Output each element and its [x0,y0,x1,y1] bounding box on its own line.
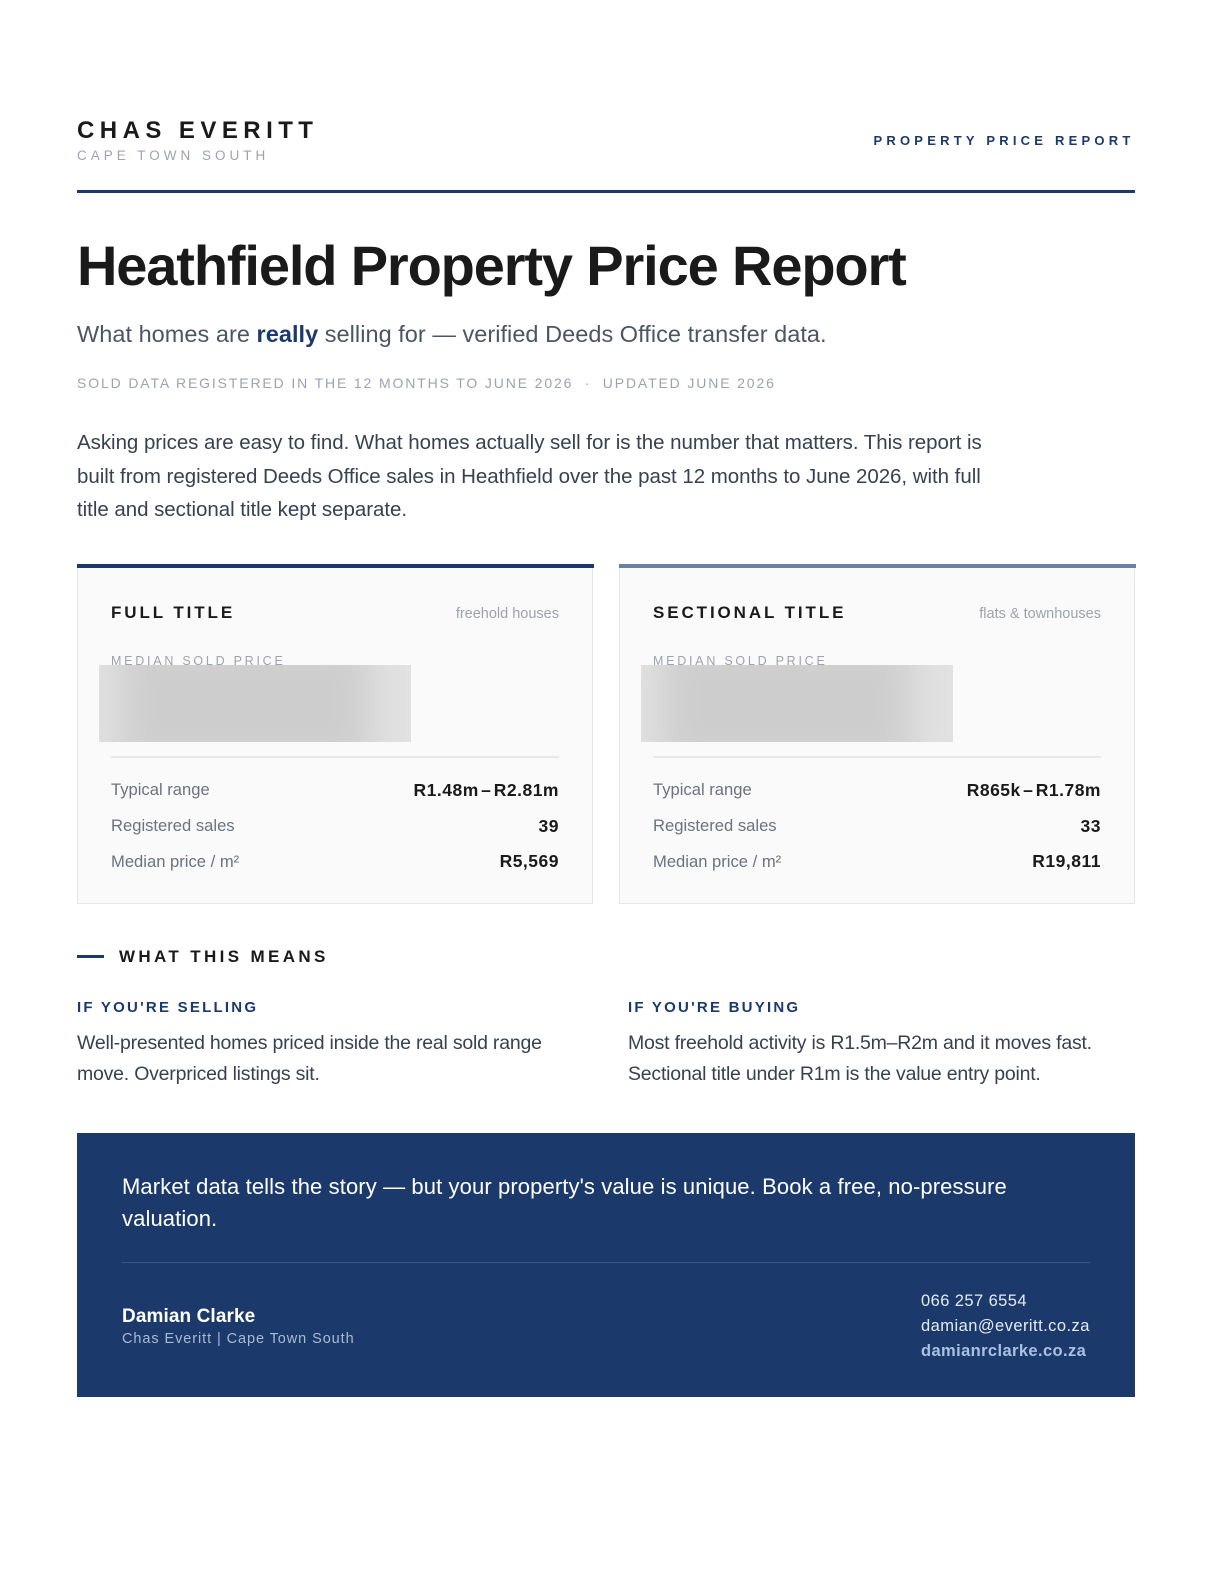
blurred median price [99,665,411,742]
intro text: built from registered Deeds Office sales in Heathfield over the past 12 months to June 2026, with full [77,464,981,488]
buying advice: Most freehold activity is R1.5m–R2m and it moves fast. [628,1032,1092,1054]
median label: MEDIAN SOLD PRICE [111,654,286,668]
heading: sectional title: SECTIONAL TITLE [653,603,846,622]
contact website: damianrclarke.co.za [921,1342,1086,1360]
brand name and location [77,117,318,163]
brand name and location: CAPE TOWN SOUTH [77,148,269,163]
median label: MEDIAN SOLD PRICE [653,654,828,668]
section heading: what this means: WHAT THIS MEANS [119,947,329,966]
value: median per m2: R19,811 [1032,851,1101,871]
panel: full title [77,564,593,904]
descriptor: freehold houses [456,606,559,622]
selling advice [77,999,542,1085]
stat: median per m2: Median price / m² [111,852,239,871]
report label: PROPERTY PRICE REPORT [873,132,1134,148]
agent company: Chas Everitt | Cape Town South [122,1331,355,1347]
contact email: damian@everitt.co.za [921,1317,1090,1335]
intro text: Asking prices are easy to find. What homes actually sell for is the number that matters. This report is [77,431,982,454]
contact phone: 066 257 6554 [921,1292,1027,1310]
call to action text: valuation. [122,1206,217,1230]
intro text [77,431,982,521]
value: typical range: R1.48m – R2.81m [414,780,559,800]
data note: SOLD DATA REGISTERED IN THE 12 MONTHS TO JUNE 2026 · UPDATED JUNE 2026 [77,375,776,391]
intro text: title and sectional title kept separate. [77,498,407,521]
value: registered sales: 33 [1081,816,1101,836]
call to action text: Market data tells the story — but your property's value is unique. Book a free, no-pressure [122,1174,1007,1198]
stat: median per m2: Median price / m² [653,852,781,871]
buying advice: Sectional title under R1m is the value entry point. [628,1063,1041,1085]
buying advice [628,999,1092,1085]
value: median per m2: R5,569 [500,851,559,871]
stat: typical range: Typical range [111,780,210,799]
agent name: Damian Clarke [122,1306,255,1327]
stat: registered sales: Registered sales [653,816,777,835]
subtitle: What homes are really selling for — verified Deeds Office transfer data. [77,321,827,347]
header rule [77,190,1135,193]
descriptor: flats & townhouses [979,606,1101,622]
stat: registered sales: Registered sales [111,816,235,835]
selling advice: move. Overpriced listings sit. [77,1063,320,1085]
call to action text [122,1174,1007,1230]
selling advice: IF YOU'RE SELLING [77,999,258,1016]
title: Heathfield Property Price Report [77,234,906,297]
selling advice: Well-presented homes priced inside the real sold range [77,1032,542,1054]
brand name and location: CHAS EVERITT [77,117,318,144]
panel: sectional title [619,564,1135,904]
buying advice: IF YOU'RE BUYING [628,999,800,1016]
value: typical range: R865k – R1.78m [967,780,1101,800]
stat: typical range: Typical range [653,780,752,799]
call to action panel [77,1133,1135,1397]
heading: full title: FULL TITLE [111,603,235,622]
blurred median price [641,665,953,742]
value: registered sales: 39 [539,816,559,836]
